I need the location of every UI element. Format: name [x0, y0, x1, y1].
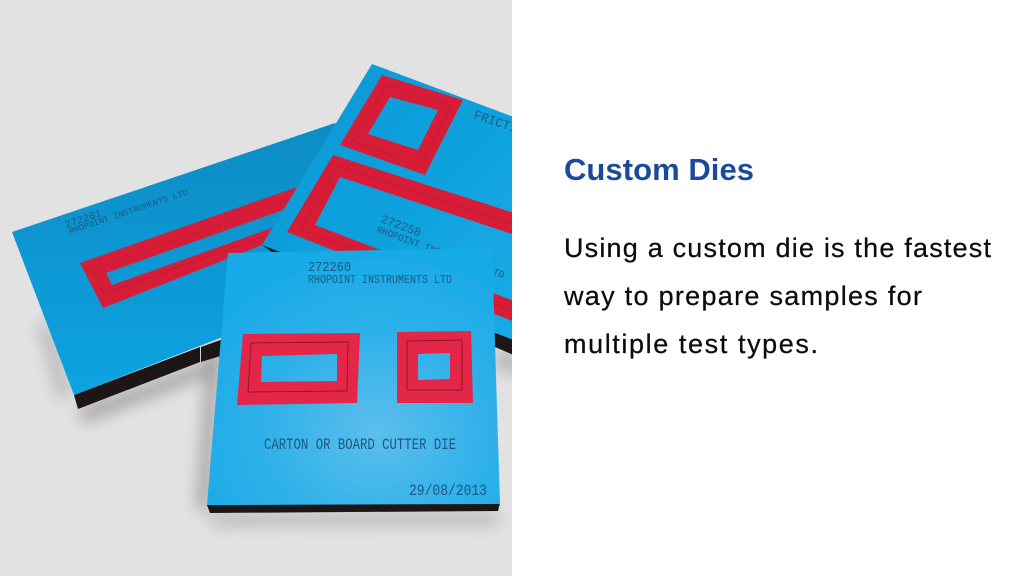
- text block: description: Using a custom die is the fastest: [564, 233, 991, 263]
- heading: Custom Dies: [564, 152, 754, 187]
- die board: left long die: [12, 123, 336, 409]
- red frame: square aperture: [397, 331, 473, 403]
- red frame: long rectangle: [80, 186, 300, 308]
- stamp: date: 29/08/2013: [409, 482, 487, 500]
- red frame: square: [340, 75, 463, 175]
- panel: product photo of custom dies: [0, 0, 533, 576]
- die board: front carton cutter die: [207, 248, 500, 513]
- text block: description: [563, 233, 991, 359]
- red frame: rectangle aperture: [237, 333, 360, 405]
- stamp: Rhopoint Instruments Ltd: RHOPOINT INSTRUMENTS LTD: [308, 273, 452, 287]
- die board: top right die: [262, 64, 512, 354]
- stamp: Rhopoint text on right die: RHOPOINT INSTRUMENTS LTD: [375, 225, 505, 282]
- stamp: friction label: FRICTION: [472, 108, 533, 141]
- red frame: wide rectangle: [287, 155, 512, 321]
- stamp: Rhopoint text on left die: RHOPOINT INSTRUMENTS LTD: [68, 187, 189, 237]
- stamp: die number 272260: 272260: [308, 260, 351, 276]
- stamp: die number 272261: 272261: [63, 208, 103, 232]
- stamp: carton or board cutter die: CARTON OR BOARD CUTTER DIE: [264, 436, 456, 454]
- stamp: die number 272258: 272258: [379, 213, 423, 240]
- text block: description: way to prepare samples for: [563, 281, 922, 311]
- text block: description: multiple test types.: [564, 329, 818, 359]
